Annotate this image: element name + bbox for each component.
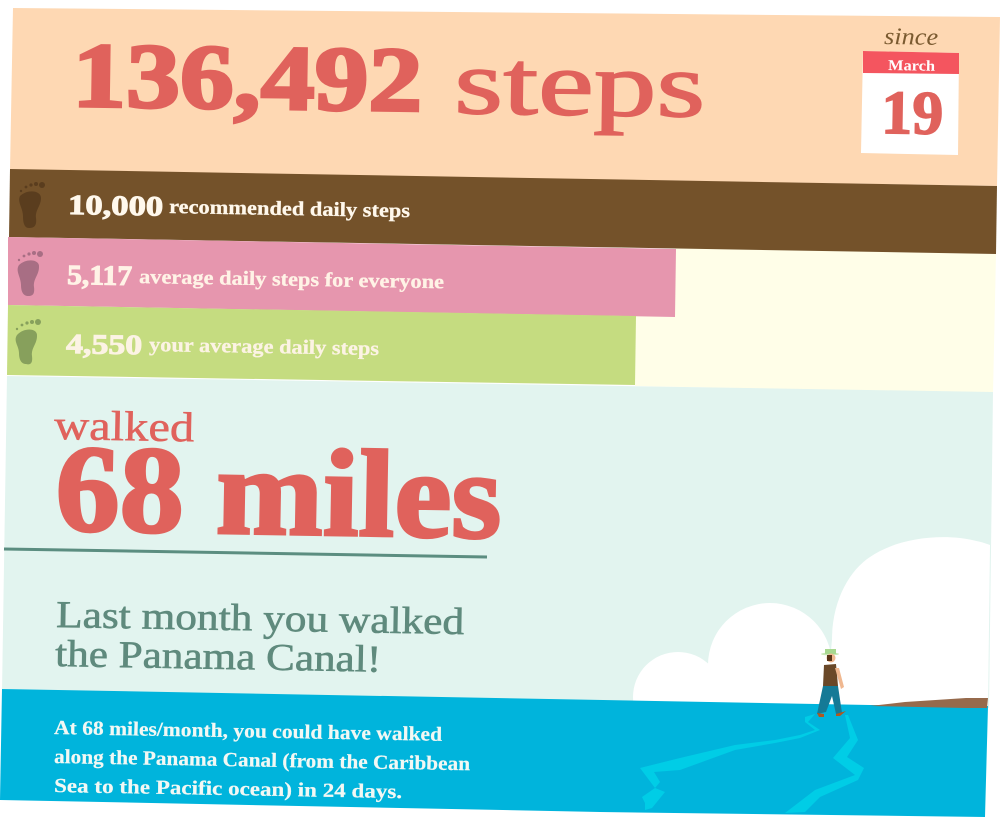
icon: calendar March 19: 19: [881, 79, 944, 148]
icon: calendar March 19: [861, 51, 959, 155]
title: total steps: [72, 24, 706, 137]
text: canal explanation: At 68 miles/month, you could have walked: [54, 717, 442, 746]
text: canal explanation: [54, 717, 470, 803]
panel: total steps header: [10, 8, 1000, 186]
label: 10,000 recommended: recommended daily steps: [169, 196, 410, 222]
icon: calendar March 19: March: [888, 58, 936, 75]
panel: distance walked: [2, 376, 993, 708]
icon: clouds: [633, 537, 990, 742]
label: 10,000 recommended: 10,000: [68, 190, 163, 223]
panel: your average daily steps bar: [7, 305, 636, 385]
label: 4,550 your average: [66, 329, 380, 361]
label: walked: walked: [54, 403, 195, 451]
text: Panama Canal headline: the Panama Canal!: [55, 633, 382, 681]
label: 4,550 your average: your average daily steps: [149, 334, 380, 360]
title: total steps: steps: [454, 31, 706, 137]
icon: footprint: [18, 251, 43, 296]
label: 5,117 average: 5,117: [67, 260, 132, 292]
icon: footprint: [16, 319, 41, 364]
title: total steps: 136,492: [72, 24, 423, 131]
icon: distant shore: [870, 698, 988, 708]
icon: footprint: [19, 182, 45, 228]
text: canal explanation: along the Panama Canal (from the Caribbean: [54, 746, 470, 775]
icon: walking person: [817, 649, 846, 717]
panel: average daily steps bar: [8, 237, 676, 317]
heading: 68 miles: 68 miles: [55, 420, 503, 565]
label: 5,117 average: [67, 260, 444, 293]
text: canal explanation: Sea to the Pacific ocean) in 24 days.: [54, 775, 402, 803]
panel: remaining bar background: [635, 248, 996, 393]
label: 4,550 your average: 4,550: [66, 329, 142, 361]
icon: canal path: [640, 714, 864, 813]
label: 10,000 recommended: [68, 190, 410, 223]
text: Panama Canal headline: [55, 594, 465, 681]
label: 5,117 average: average daily steps for everyone: [139, 266, 444, 293]
since label: since: [884, 24, 939, 51]
panel: water and canal explanation: [0, 689, 988, 817]
text: Panama Canal headline: Last month you walked: [56, 594, 465, 643]
panel: recommended daily steps bar: [9, 169, 997, 254]
